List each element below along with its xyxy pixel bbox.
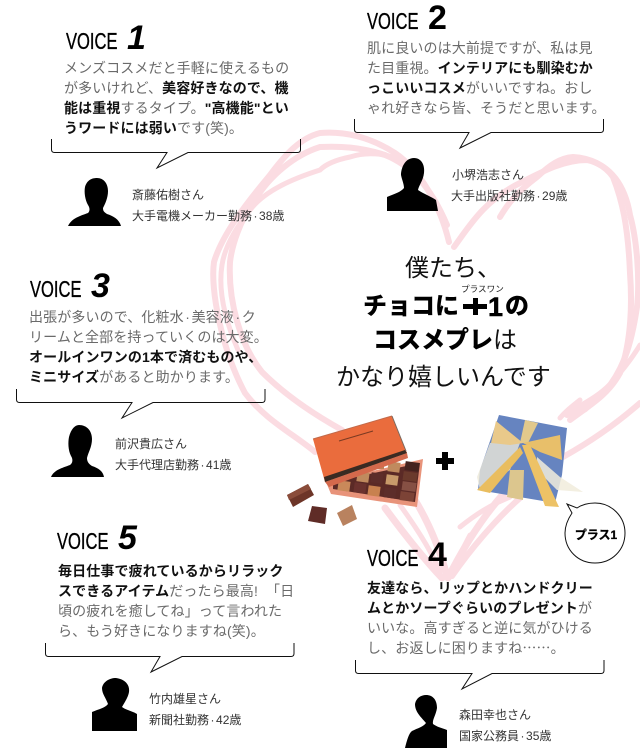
person 5 name: 竹内雄星さん [149, 692, 221, 706]
voice 3 text: ミニサイズがあると助かります。 [29, 369, 239, 385]
voice 3 heading [30, 267, 110, 305]
person 2 name [451, 168, 567, 203]
voice 4 heading: 4 [428, 536, 447, 574]
voice 2 heading [366, 0, 447, 37]
voice 5 text: スできるアイテムだったら最高! 「日 [58, 583, 294, 599]
person 3 name [115, 437, 231, 472]
voice 5 text: 頃の疲れを癒してね」って言われた [58, 603, 282, 619]
voice 4 text [367, 580, 593, 658]
voice 1 text: が多いけれど、美容好きなので、機 [64, 80, 289, 96]
voice 4 heading [366, 536, 447, 574]
headline line 4: かなり嬉しいんです [336, 364, 551, 391]
voice 4 text: し、お返しに困りますね……。 [367, 638, 565, 658]
voice 3 text: リームと全部を持っていくのは大変。 [29, 329, 268, 345]
voice 2 text: 肌に良いのは大前提ですが、私は見 [367, 40, 593, 56]
person 2 name: 大手出版社勤務·29歳 [451, 189, 567, 203]
voice 2 text [367, 40, 606, 116]
voice 1 text: うワードには弱いです(笑)。 [64, 120, 243, 136]
voice 4 text: ムとかソープぐらいのプレゼントが [367, 600, 592, 616]
voice 5 heading: 5 [118, 519, 137, 557]
person 4 name: 国家公務員·35歳 [459, 729, 551, 743]
headline line 1: 僕たち、 [405, 255, 501, 282]
voice 1 text: メンズコスメだと手軽に使えるもの [64, 60, 289, 76]
chocolate tray [326, 459, 423, 507]
voice 3 heading: VOICE [30, 276, 82, 302]
icon: bold plus [463, 304, 487, 309]
headline line 2: チョコに [363, 293, 459, 320]
voice 4 text: いいな。高すぎると逆に気がひける [367, 620, 593, 636]
voice 2 text: た目重視。インテリアにも馴染むか [367, 60, 593, 76]
voice 3 text [29, 309, 268, 385]
person 5 name [149, 692, 241, 727]
voice 5 text: ら、もう好きになりますね(笑)。 [58, 623, 265, 639]
voice 5 heading [56, 519, 138, 557]
person 1 name: 斎藤佑樹さん [132, 188, 204, 202]
person 4 name: 森田幸也さん [459, 708, 531, 722]
voice 3 heading: 3 [91, 267, 110, 305]
voice 1 heading: 1 [127, 19, 146, 57]
icon: plus sign [436, 452, 454, 470]
voice 4 text: 友達なら、リップとかハンドクリー [367, 580, 593, 596]
voice 5 text [58, 563, 294, 639]
person 3 name: 大手代理店勤務·41歳 [115, 458, 231, 472]
headline line 2 [363, 292, 529, 322]
callout: plus one bubble: プラス1 [575, 528, 618, 542]
headline line 2: の [505, 293, 529, 320]
chocolate lid [325, 453, 408, 487]
person 1 name: 大手電機メーカー勤務·38歳 [132, 209, 284, 223]
voice 3 text: 出張が多いので、化粧水·美容液·ク [29, 309, 256, 325]
voice 1 text [64, 60, 289, 136]
person 2 name: 小堺浩志さん [452, 168, 524, 182]
loose chocolates [287, 484, 314, 507]
voice 2 text: ゃれ好きなら皆、そうだと思います。 [367, 100, 606, 116]
voice 2 heading: 2 [428, 0, 447, 37]
voice 2 text: っこいいコスメがいいですね。おし [367, 80, 593, 96]
headline [336, 255, 551, 391]
person 3 name: 前沢貴広さん [115, 437, 187, 451]
headline line 2: 1 [488, 292, 503, 322]
voice 1 text: 能は重視するタイプ。"高機能"とい [64, 100, 289, 116]
voice 1 heading [66, 19, 146, 57]
voice 1 heading: VOICE [66, 28, 118, 54]
voice 5 heading: VOICE [57, 528, 109, 554]
person 1 name [132, 188, 284, 223]
voice 2 heading: VOICE [367, 8, 419, 34]
headline line 3: コスメプレは [373, 327, 517, 354]
ruby: plus one: プラスワン [461, 284, 504, 294]
person 4 name [459, 708, 551, 743]
voice 3 text: オールインワンの1本で済むものや、 [29, 349, 262, 365]
voice 4 heading: VOICE [367, 545, 419, 571]
person 5 name: 新聞社勤務·42歳 [149, 713, 241, 727]
voice 5 text: 毎日仕事で疲れているからリラック [58, 563, 284, 579]
